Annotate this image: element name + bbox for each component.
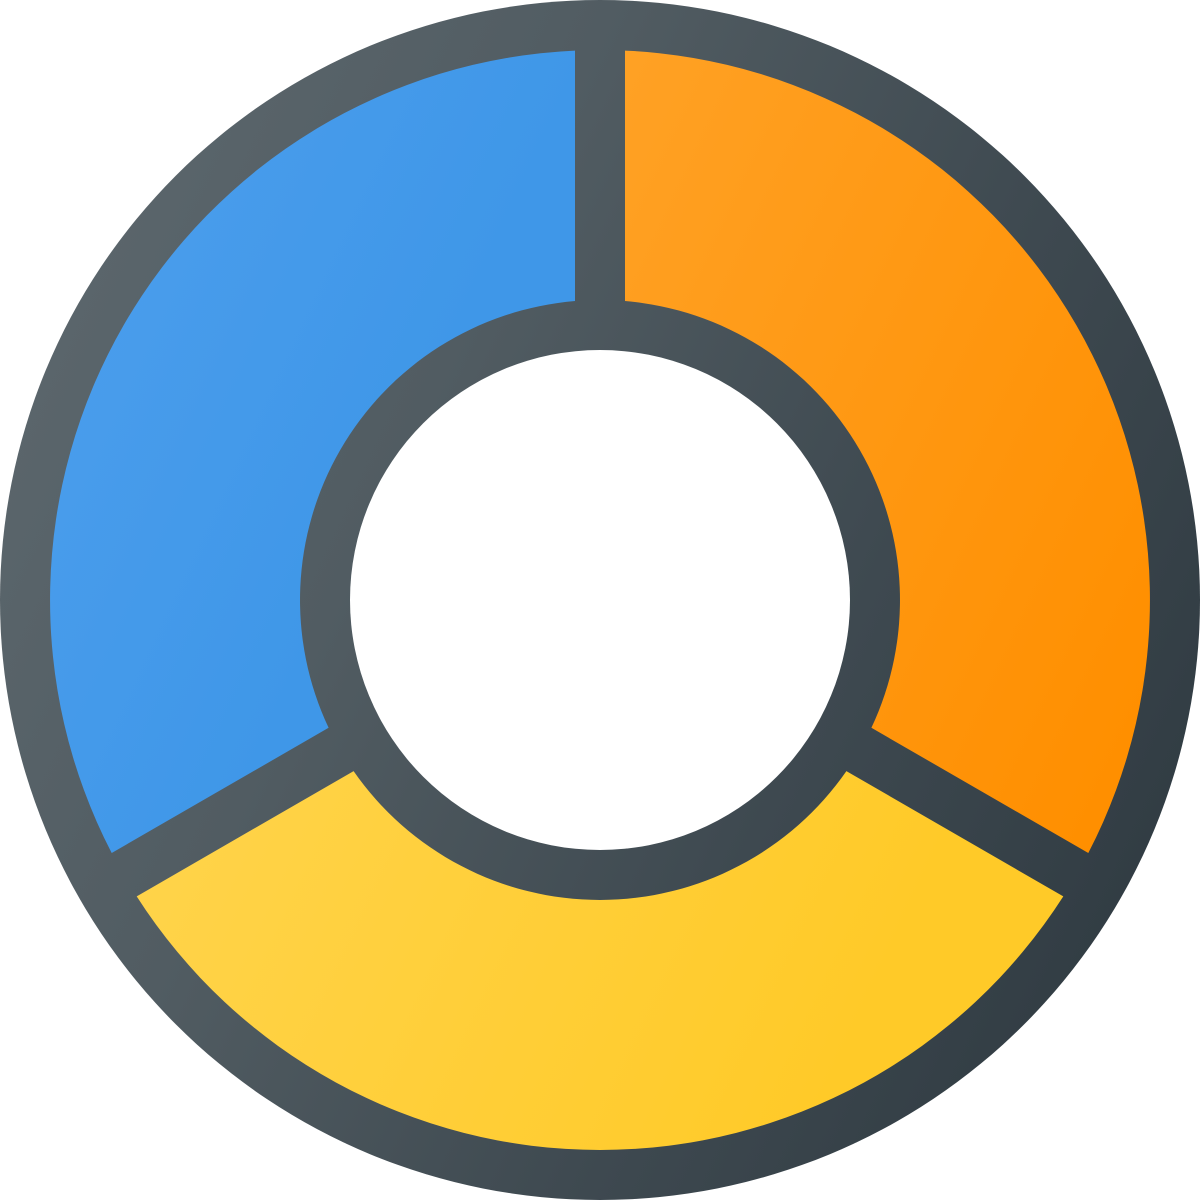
segment: orange	[625, 51, 1150, 853]
center hole	[350, 350, 850, 850]
segment: blue	[50, 51, 575, 853]
segment: yellow	[137, 771, 1063, 1150]
